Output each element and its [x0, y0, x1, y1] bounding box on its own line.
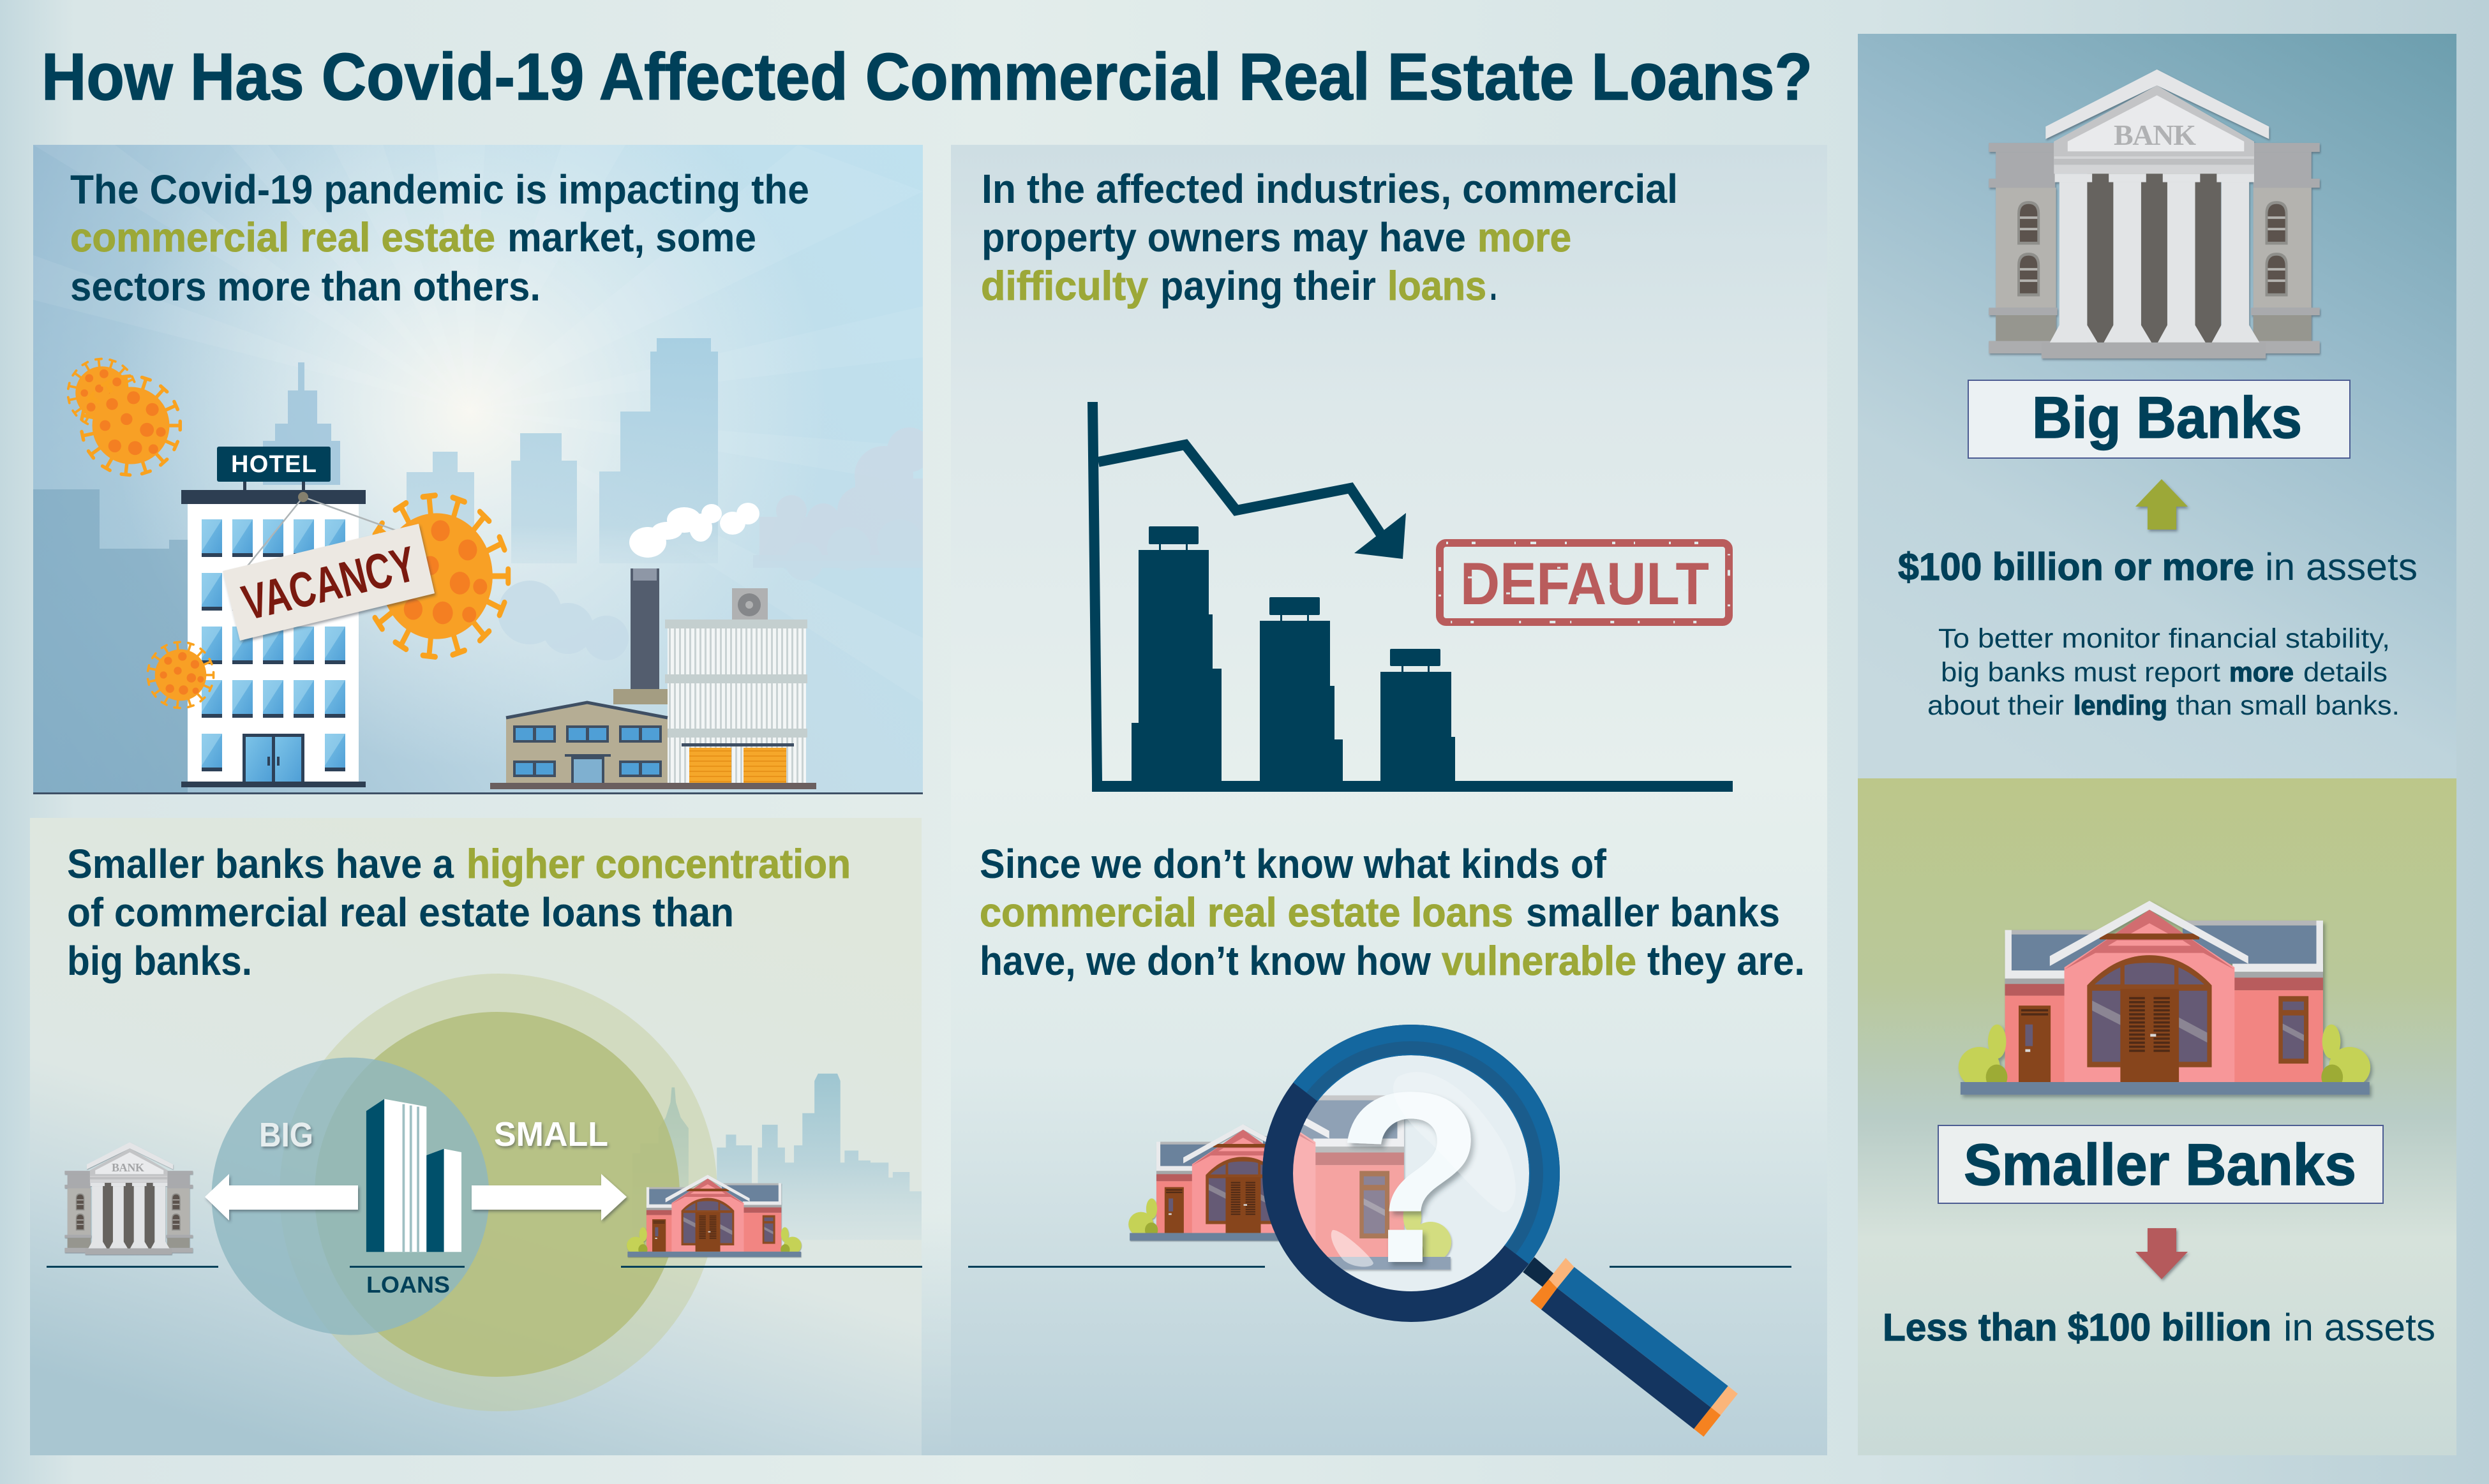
icon: bank: BANK	[2114, 119, 2196, 151]
venn: small banks inner circle	[315, 1012, 680, 1377]
icon: virus behind sign	[365, 496, 508, 657]
text block: loans	[1387, 263, 1486, 309]
icon: magnifying glass	[1262, 1025, 1738, 1437]
vacancy sign	[223, 492, 435, 641]
text block: have, we don’t know how	[980, 938, 1431, 984]
icon: house	[1959, 901, 2370, 1095]
text block: sectors more than others.	[70, 263, 541, 309]
icon: bank	[1989, 70, 2320, 359]
threshold text	[1898, 545, 2418, 588]
heading box: big banks: Big Banks	[2032, 385, 2302, 450]
text block: property owners may have	[982, 214, 1466, 260]
text block	[67, 841, 851, 984]
description text: To better monitor financial stability,	[1938, 623, 2390, 654]
label: loans: LOANS	[366, 1272, 450, 1298]
text block: Since we don’t know what kinds of	[980, 841, 1607, 887]
icon: small bank illustration: BANK	[112, 1161, 144, 1174]
text block	[980, 841, 1805, 984]
text block: higher concentration	[467, 841, 851, 887]
arrow: down	[2135, 1228, 2188, 1279]
text block	[70, 167, 809, 309]
icon: magnifying glass: ?	[1336, 1041, 1485, 1314]
venn: big banks circle	[212, 1058, 489, 1335]
description text: details	[2303, 657, 2388, 688]
panel: property owners difficulty	[951, 145, 1827, 810]
illustration: factory with smoke	[490, 503, 816, 789]
label: loans	[350, 1266, 465, 1298]
threshold text: in assets	[2283, 1306, 2435, 1349]
icon: small virus on hotel	[148, 642, 214, 708]
text block: commercial real estate	[70, 214, 495, 260]
heading box: smaller banks: Smaller Banks	[1964, 1132, 2356, 1198]
text block: In the affected industries, commercial	[982, 166, 1678, 212]
icon: virus behind others	[68, 359, 136, 427]
text block: vulnerable	[1442, 938, 1636, 984]
threshold text: in assets	[2265, 545, 2418, 588]
panel: big banks	[1858, 34, 2456, 778]
panel: smaller banks concentration	[30, 818, 951, 1455]
text block: smaller banks	[1526, 889, 1780, 935]
text block: difficulty	[981, 263, 1148, 309]
label: small: SMALL	[494, 1115, 608, 1154]
text block: more	[1477, 214, 1571, 260]
arrow: up	[2135, 479, 2188, 530]
description text: lending	[2074, 690, 2167, 721]
icon: house behind magnifier	[1128, 1124, 1375, 1240]
arrow: to big banks	[205, 1174, 358, 1221]
illustration: hotel building: HOTEL	[231, 451, 317, 478]
heading box: big banks	[1968, 380, 2350, 458]
icon: virus top left	[82, 376, 180, 475]
threshold text: Less than $100 billion	[1883, 1306, 2271, 1349]
description text: big banks must report	[1941, 657, 2220, 688]
icon: small house illustration	[627, 1175, 802, 1257]
text block: big banks.	[67, 938, 252, 984]
chart: falling buildings with arrow	[1088, 402, 1733, 792]
text block: commercial real estate loans	[980, 889, 1513, 935]
text block: .	[1490, 263, 1497, 309]
city skyline and sun rays background	[33, 145, 932, 794]
text block: paying their	[1160, 263, 1376, 309]
description text	[1927, 623, 2400, 721]
panel: smaller banks	[1858, 778, 2456, 1455]
text block: of commercial real estate loans than	[67, 889, 734, 935]
icon: loans buildings	[366, 1099, 461, 1252]
text block: they are.	[1647, 938, 1805, 984]
text block: Smaller banks have a	[67, 841, 454, 887]
title: How Has Covid-19 Affected Commercial Real Estate Loans?	[41, 40, 1813, 114]
description text: than small banks.	[2176, 690, 2400, 721]
arrow: to small banks	[472, 1174, 627, 1221]
illustration: hotel building	[181, 447, 366, 787]
background city	[664, 1073, 922, 1236]
panel: commercial real estate market	[33, 145, 932, 794]
vacancy sign: VACANCY	[237, 535, 421, 631]
description text: about their	[1927, 690, 2064, 721]
text block	[981, 166, 1678, 309]
label: big: BIG	[259, 1116, 313, 1154]
text block: market, some	[507, 214, 756, 260]
panel: unknown vulnerability	[951, 810, 1827, 1455]
venn: small banks outer circle	[280, 974, 717, 1411]
icon: small bank illustration	[64, 1142, 193, 1254]
text block: The Covid-19 pandemic is impacting the	[70, 167, 809, 212]
threshold text: $100 billion or more	[1898, 545, 2254, 588]
stamp: default: DEFAULT	[1460, 550, 1709, 617]
description text: more	[2229, 657, 2294, 688]
